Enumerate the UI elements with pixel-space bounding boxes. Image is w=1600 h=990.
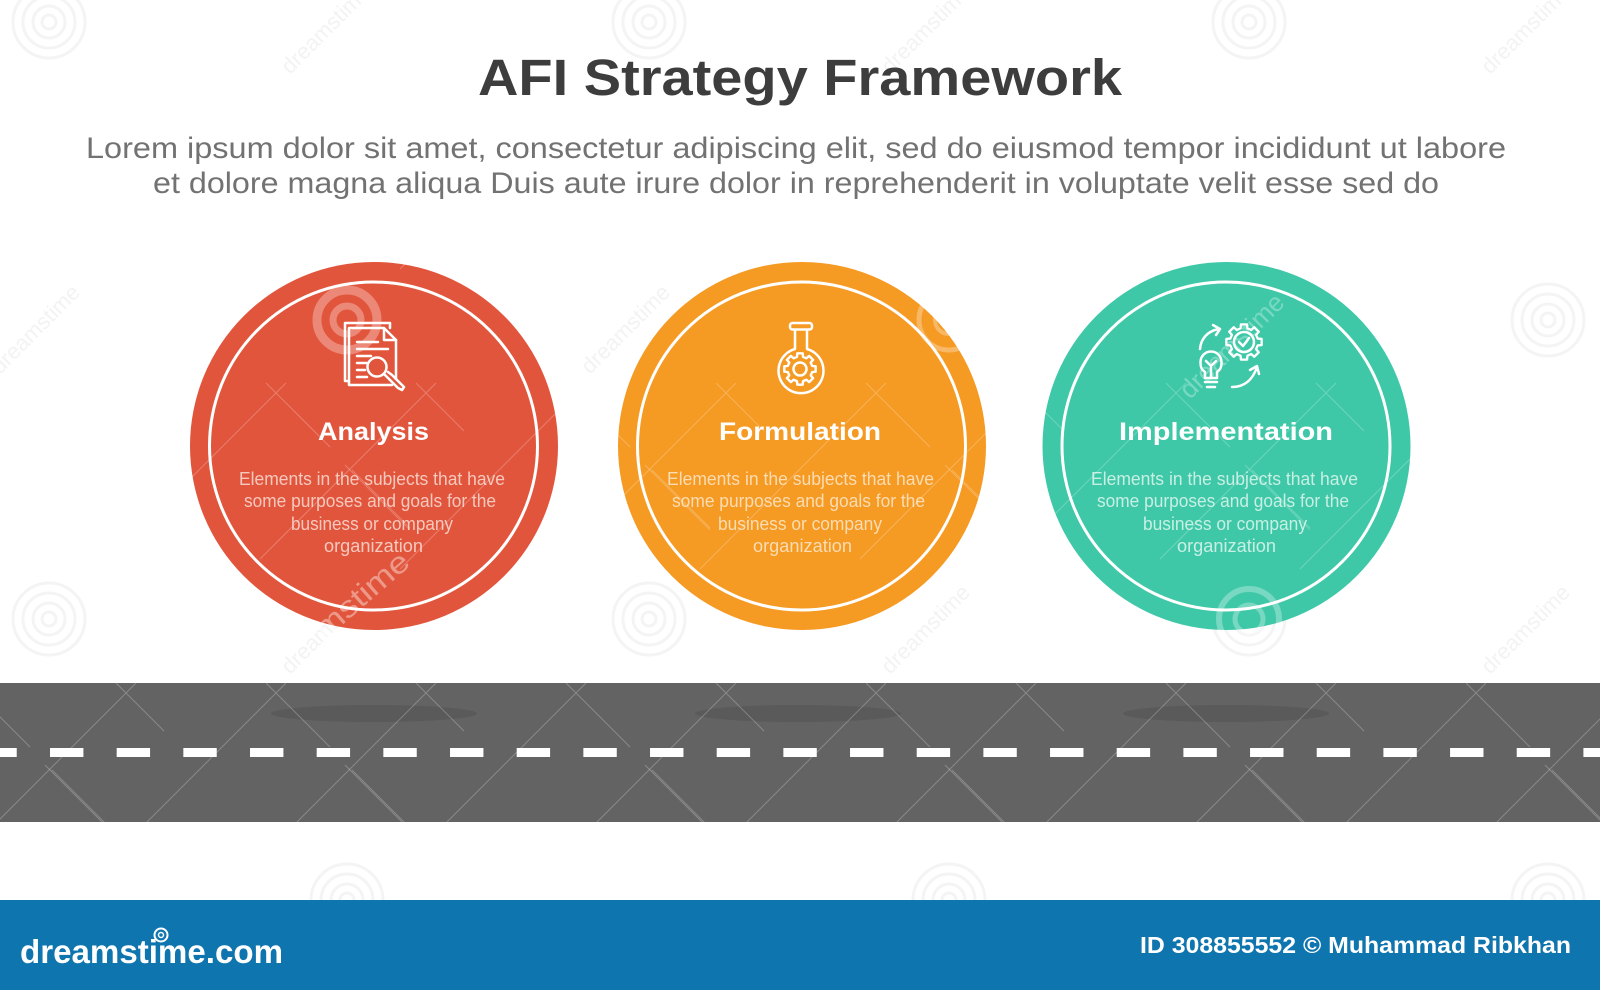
body text: Implementation: [1091, 469, 1358, 556]
road: [0, 683, 1600, 822]
watermark spirals on background: dreamstime: [576, 280, 675, 379]
body text: Analysis: Elements in the subjects that have: [239, 469, 505, 489]
title: AFI Strategy Framework: [478, 49, 1123, 106]
footer logo: dreamstime.com: [20, 933, 283, 970]
heading: Implementation: Implementation: [1119, 418, 1333, 446]
icon: flask with gear: [779, 323, 824, 393]
body text: Implementation: business or company: [1143, 514, 1307, 534]
footer bar: [0, 900, 1600, 990]
subtitle text block: Lorem ipsum dolor sit amet, consectetur adipiscing elit, sed do eiusmod tempor incididunt ut labore: [86, 132, 1506, 165]
watermark spirals on background: dreamstime: [1476, 580, 1575, 679]
watermark overlay: [0, 250, 1600, 900]
heading: Formulation: Formulation: [719, 418, 881, 446]
body text: Implementation: some purposes and goals for the: [1097, 491, 1349, 511]
subtitle text block: [86, 132, 1506, 200]
icon: bulb, gear and arrows: [1200, 324, 1262, 387]
body text: Formulation: business or company: [718, 514, 882, 534]
body text: Analysis: business or company: [291, 514, 453, 534]
watermark overlay: dreamstime: [1173, 287, 1290, 404]
watermark spirals on background: dreamstime: [876, 580, 975, 679]
panel: implementation: [1042, 262, 1410, 630]
panel: formulation: [618, 262, 986, 630]
body text: Analysis: organization: [324, 536, 423, 556]
body text: Formulation: some purposes and goals for the: [672, 491, 925, 511]
panel: analysis: [190, 262, 558, 630]
heading: Analysis: Analysis: [318, 418, 429, 446]
body text: Formulation: Elements in the subjects that have: [667, 469, 934, 489]
body text: Formulation: [667, 469, 934, 556]
watermark spirals on background: dreamstime: [276, 580, 375, 679]
body text: Implementation: organization: [1177, 536, 1276, 556]
body text: Analysis: [239, 469, 505, 556]
body text: Formulation: organization: [753, 536, 852, 556]
body text: Implementation: Elements in the subjects that have: [1091, 469, 1358, 489]
body text: Analysis: some purposes and goals for the: [244, 491, 496, 511]
footer credit: ID 308855552 © Muhammad Ribkhan: [1140, 932, 1571, 958]
icon: document with magnifier: [345, 323, 404, 390]
subtitle text block: et dolore magna aliqua Duis aute irure dolor in reprehenderit in voluptate velit esse sed do: [153, 167, 1439, 200]
road shadows: [271, 705, 1329, 722]
road centre dashes: [0, 748, 1600, 757]
watermark overlay: mstime: [308, 545, 416, 645]
